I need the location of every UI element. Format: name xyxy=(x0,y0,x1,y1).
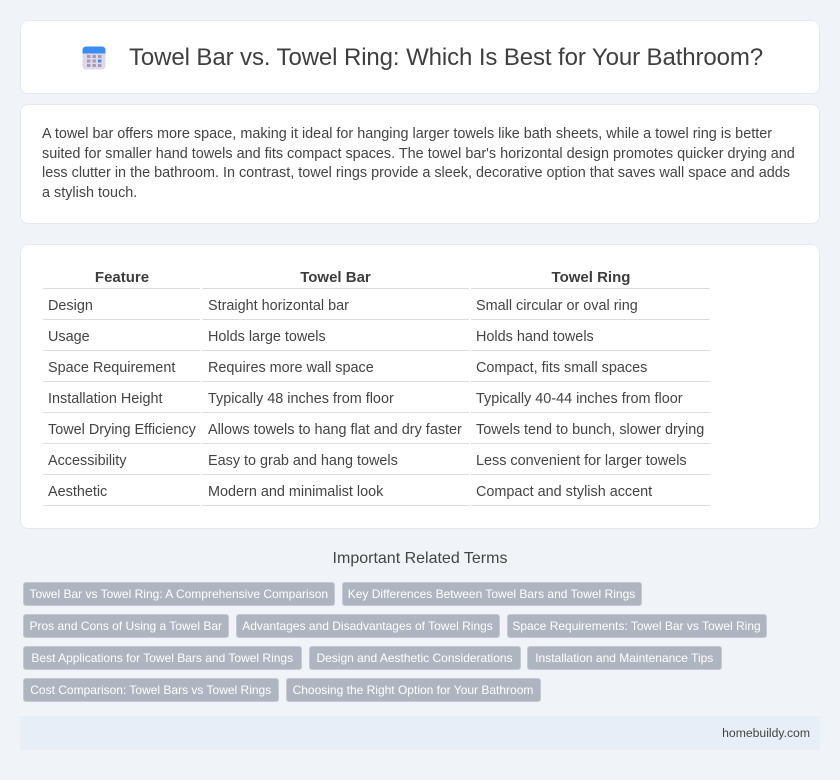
comparison table: Design xyxy=(48,298,93,314)
comparison table: Less convenient for larger towels xyxy=(476,453,687,469)
tag: Design and Aesthetic Considerations xyxy=(316,651,513,665)
tag xyxy=(23,678,278,702)
tag xyxy=(527,646,722,670)
tag: Cost Comparison: Towel Bars vs Towel Rings xyxy=(30,683,271,697)
intro paragraph: less clutter in the bathroom. In contrast, towel rings provide a sleek, decorative option that saves wall space and adds xyxy=(42,165,790,181)
comparison table: Compact and stylish accent xyxy=(476,484,652,500)
tag: Installation and Maintenance Tips xyxy=(535,651,713,665)
tag xyxy=(236,614,500,638)
tag: Pros and Cons of Using a Towel Bar xyxy=(29,619,222,633)
column header: Feature: Feature xyxy=(95,269,149,286)
comparison table: Typically 48 inches from floor xyxy=(208,391,394,407)
column header: Towel Ring: Towel Ring xyxy=(552,269,630,286)
comparison table: Modern and minimalist look xyxy=(208,484,383,500)
comparison table: Holds hand towels xyxy=(476,329,594,345)
comparison table: Easy to grab and hang towels xyxy=(208,453,398,469)
tag: Best Applications for Towel Bars and Towel Rings xyxy=(31,651,293,665)
comparison table: Holds large towels xyxy=(208,329,326,345)
tag: Space Requirements: Towel Bar vs Towel Ring xyxy=(512,619,761,633)
icon: calendar xyxy=(82,46,106,70)
tag: Towel Bar vs Towel Ring: A Comprehensive Comparison xyxy=(29,587,328,601)
tag xyxy=(23,646,302,670)
tag: Choosing the Right Option for Your Bathroom xyxy=(293,683,533,697)
comparison table: Aesthetic xyxy=(48,484,107,500)
comparison table: Compact, fits small spaces xyxy=(476,360,647,376)
comparison table: Installation Height xyxy=(48,391,163,407)
comparison table: Accessibility xyxy=(48,453,126,469)
tag: Advantages and Disadvantages of Towel Rings xyxy=(242,619,493,633)
panel: comparison table xyxy=(20,244,820,529)
panel: intro text xyxy=(20,104,820,224)
footer source: homebuildy.com xyxy=(722,726,810,740)
tag: Key Differences Between Towel Bars and Towel Rings xyxy=(348,587,635,601)
comparison table: Typically 40-44 inches from floor xyxy=(476,391,683,407)
comparison table: Towel Drying Efficiency xyxy=(48,422,196,438)
comparison table: Usage xyxy=(48,329,90,345)
tag xyxy=(286,678,540,702)
comparison table: Allows towels to hang flat and dry faster xyxy=(208,422,462,438)
tag xyxy=(23,614,228,638)
related terms heading: Important Related Terms xyxy=(333,550,507,567)
related term tags xyxy=(23,582,767,702)
intro paragraph: A towel bar offers more space, making it ideal for hanging larger towels like bath sheets, while a towel ring is better xyxy=(42,126,772,142)
tag xyxy=(342,582,642,606)
header panel xyxy=(20,20,820,94)
comparison table: Requires more wall space xyxy=(208,360,374,376)
footer bar xyxy=(20,716,820,750)
comparison table: Straight horizontal bar xyxy=(208,298,349,314)
tag xyxy=(506,614,766,638)
intro paragraph: a stylish touch. xyxy=(42,184,137,200)
comparison table: Towels tend to bunch, slower drying xyxy=(476,422,704,438)
tag xyxy=(308,646,520,670)
tag xyxy=(23,582,334,606)
intro paragraph: suited for smaller hand towels and fits compact spaces. The towel bar's horizontal design promotes quicker drying and xyxy=(42,146,795,162)
intro paragraph xyxy=(42,126,795,200)
comparison table: Small circular or oval ring xyxy=(476,298,638,314)
column header: Towel Bar: Towel Bar xyxy=(300,269,371,286)
comparison table: Space Requirement xyxy=(48,360,175,376)
comparison table xyxy=(43,269,710,506)
title: Towel Bar vs. Towel Ring: Which Is Best for Your Bathroom? xyxy=(129,44,763,71)
